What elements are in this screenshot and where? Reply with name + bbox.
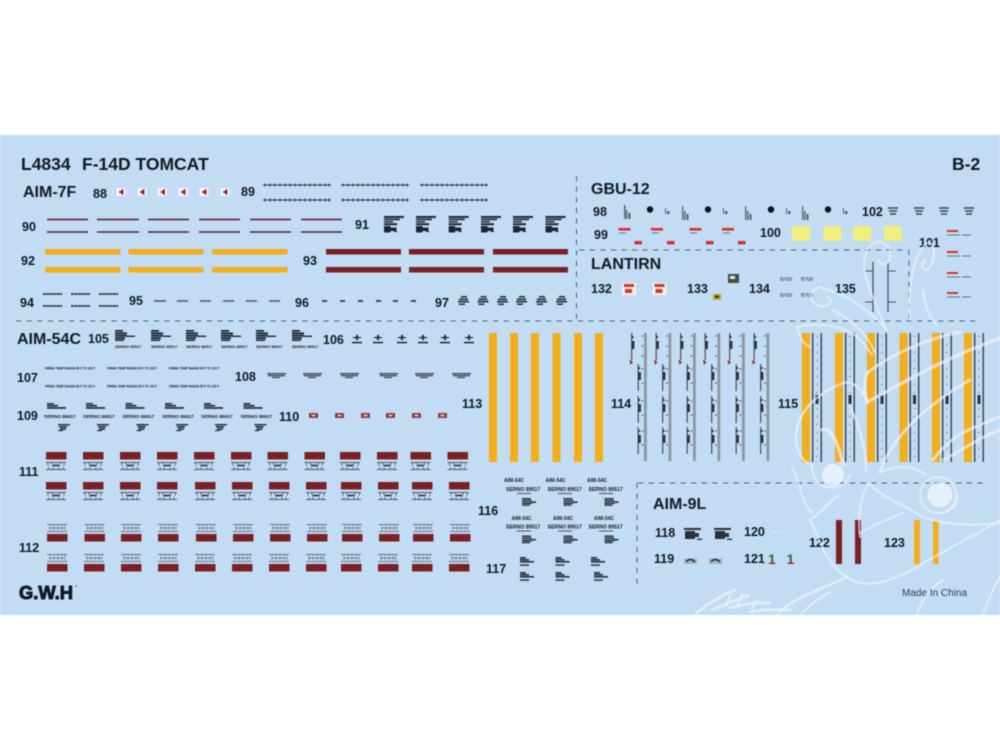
- sheet code B-2: B-2: [952, 154, 980, 174]
- decal 91: 91: [355, 218, 369, 232]
- decal 116: AIM-54C: [546, 478, 566, 484]
- heading: GBU-12: GBU-12: [591, 181, 650, 198]
- decal 107: FIRING TEMP RANGE 65 F TO 100 F: [107, 366, 157, 370]
- decal 112: 112: [19, 541, 39, 555]
- decal 121: 121: [744, 552, 765, 566]
- decal 93: [303, 249, 568, 272]
- decal 133: [687, 274, 739, 300]
- section dashed dividers: [16, 176, 984, 587]
- decal 105: SERNO 89517: [186, 344, 213, 349]
- logo: G.W.H: G.W.H: [19, 583, 73, 603]
- decal 99: [594, 228, 746, 244]
- decal 106: [323, 333, 474, 347]
- decal 108: 108: [235, 370, 256, 384]
- decal 92: [21, 249, 288, 272]
- decal 110: 110: [279, 410, 299, 424]
- decal 118: 118: [655, 526, 675, 540]
- decal 109: SERNO 89917: [162, 414, 194, 420]
- decal 105: SERNO 89517: [221, 344, 248, 349]
- decal 116: SERNO 89517: [548, 524, 582, 530]
- decal 133: 133: [687, 282, 708, 296]
- decal 113: 113: [462, 397, 482, 411]
- decal 107: FIRING TEMP RANGE 65 F TO 100 F: [169, 366, 219, 370]
- decal 105: SERNO 89517: [115, 344, 142, 349]
- heading: LANTIRN: LANTIRN: [591, 256, 661, 273]
- title: F-14D TOMCAT: [82, 154, 209, 174]
- decal 109: SERNO 89917: [122, 414, 155, 420]
- decal 118: [655, 526, 732, 540]
- heading: AIM-9L: AIM-9L: [653, 496, 707, 513]
- decal 95: 95: [129, 294, 143, 308]
- decal 121: [744, 551, 794, 567]
- decal 120: 120: [744, 525, 765, 539]
- decal 109: SERNO 89917: [44, 414, 76, 420]
- decal 109: SERNO 89917: [240, 414, 273, 420]
- decal 116: AIM-54C: [594, 516, 614, 522]
- decal 97: [435, 296, 567, 310]
- decal 122: 122: [809, 536, 830, 550]
- decal 135: [835, 262, 896, 312]
- watermark: rabbit line illustration: [696, 242, 1000, 615]
- decal 109: SERNO 89917: [201, 414, 233, 420]
- panel: AIM-7F: [20, 184, 568, 310]
- decal 92: 92: [21, 254, 35, 268]
- decal 116: SERNO 89517: [548, 487, 582, 493]
- decal 109: SERNO 89917: [83, 414, 115, 420]
- decal 89: [241, 184, 488, 202]
- decal 108: [235, 370, 471, 384]
- decal 117: 117: [486, 562, 506, 576]
- decal 88: 88: [93, 187, 107, 201]
- decal 109: 109: [17, 409, 38, 423]
- decal 96: [295, 296, 416, 310]
- decal 102: [862, 205, 974, 219]
- decal 98: [593, 205, 848, 220]
- decal 119: 119: [654, 552, 674, 566]
- decal 134: NO PUSH: [780, 277, 792, 283]
- decal 105: [88, 330, 319, 349]
- decal 90: 90: [22, 220, 36, 234]
- decal 116: AIM-54C: [504, 478, 524, 484]
- decal 134: NO PUSH: [801, 277, 813, 283]
- decal 116: SERNO 89517: [506, 524, 540, 530]
- decal 105: SERNO 89517: [292, 344, 319, 349]
- decal 120: [744, 525, 785, 539]
- decal 122: [809, 520, 861, 564]
- decal 116: AIM-54C: [587, 478, 607, 484]
- title: [21, 154, 209, 174]
- heading: AIM-7F: AIM-7F: [23, 184, 77, 201]
- decal 105: SERNO 89517: [256, 344, 283, 349]
- decal 107: [17, 366, 219, 388]
- decal 116: SERNO 89517: [506, 487, 540, 493]
- decal 107: FIRING TEMP RANGE 65 F TO 100 F: [107, 384, 157, 388]
- panel: GBU-12: [591, 181, 974, 297]
- panel: LANTIRN: [591, 256, 896, 312]
- decal 117: [486, 557, 608, 581]
- heading: AIM-54C: AIM-54C: [17, 331, 81, 348]
- decal 134: NO PUSH: [801, 293, 813, 299]
- decal 114: [611, 333, 769, 461]
- decal 116: 116: [478, 504, 498, 518]
- decal 123: 123: [884, 536, 905, 550]
- decal 134: [749, 277, 813, 299]
- decal 116: SERNO 89517: [588, 524, 623, 530]
- panel: AIM-54C: [17, 330, 984, 581]
- footer: made in China: Made In China: [902, 588, 967, 599]
- decal 101: [919, 230, 971, 297]
- panel: AIM-9L: [653, 496, 938, 567]
- blue decal sheet background: [0, 135, 1000, 615]
- decal 110: [279, 410, 447, 424]
- decal 116: SERNO 89517: [588, 487, 623, 493]
- decal 134: NO PUSH: [780, 293, 792, 299]
- decal 105: SERNO 89517: [151, 344, 178, 349]
- decal 121: 1: [786, 551, 794, 567]
- decal 115: 115: [778, 397, 798, 411]
- decal 111: 111: [19, 465, 39, 479]
- decal 116: AIM-54C: [553, 516, 573, 522]
- decal 94: 94: [20, 296, 34, 310]
- decal 111: [19, 452, 470, 500]
- decal 105: 105: [88, 332, 109, 346]
- decal 89: 89: [241, 185, 255, 199]
- decal 97: 97: [435, 296, 449, 310]
- title: L4834: [21, 154, 71, 174]
- decal 100: [760, 226, 902, 241]
- decal 93: 93: [303, 254, 317, 268]
- decal 135: 135: [835, 282, 856, 296]
- decal 107: 107: [17, 371, 38, 385]
- decal 114: 114: [611, 397, 631, 411]
- decal 91: [355, 216, 566, 232]
- decal 98: 98: [593, 205, 607, 219]
- decal 94: [20, 294, 118, 310]
- decal 132: 132: [591, 282, 612, 296]
- decal 100: 100: [760, 226, 781, 240]
- decal 88: [93, 187, 230, 201]
- decal 113: [462, 333, 603, 462]
- decal 132: [591, 282, 666, 296]
- decal 101: 101: [919, 236, 940, 250]
- decal 121: 1: [768, 551, 776, 567]
- decal 119: [654, 552, 722, 566]
- decal 107: FIRING TEMP RANGE 65 F TO 100 F: [45, 366, 95, 370]
- decal 134: 134: [749, 282, 770, 296]
- decal 99: 99: [594, 228, 608, 242]
- decal 112: [19, 524, 470, 572]
- decal 116: AIM-54C: [512, 516, 532, 522]
- decal 96: 96: [295, 296, 309, 310]
- decal 109: [17, 403, 273, 431]
- decal 123: [884, 520, 938, 564]
- decal 107: FIRING TEMP RANGE 65 F TO 100 F: [169, 384, 219, 388]
- decal 116: [478, 478, 623, 543]
- decal 107: FIRING TEMP RANGE 65 F TO 100 F: [45, 384, 95, 388]
- decal 115: [778, 333, 984, 462]
- decal 106: 106: [323, 333, 344, 347]
- decal 102: 102: [862, 205, 883, 219]
